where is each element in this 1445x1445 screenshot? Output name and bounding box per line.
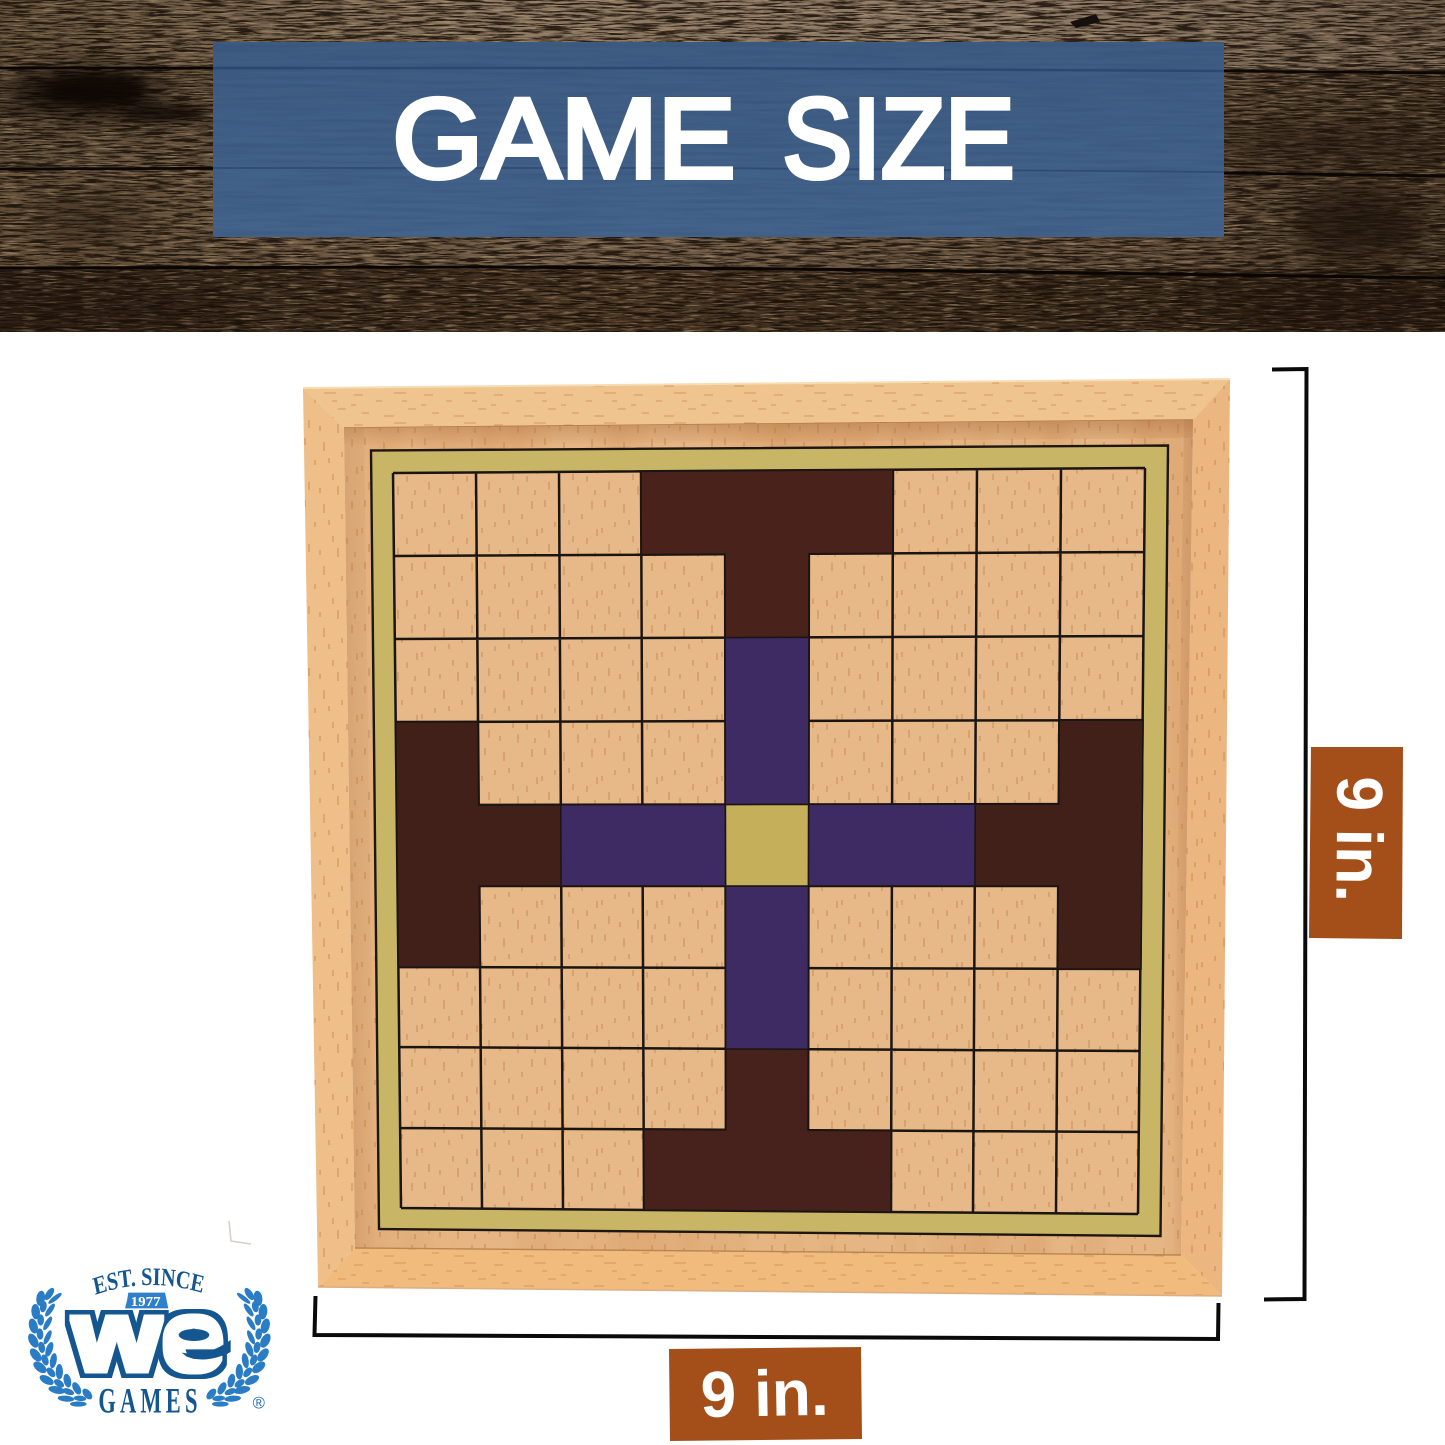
heading: GAME SIZE (392, 76, 1014, 202)
heading: GAME SIZE: GAME (392, 76, 736, 202)
header: rustic wood plank banner (0, 0, 1445, 332)
frame: top rail (303, 379, 1230, 428)
logo text: GAMES: GAMES (98, 1381, 202, 1421)
dimension bracket: height (1264, 369, 1306, 1300)
label: height 9 in.: 9 in. (1322, 776, 1396, 903)
game board: wooden framed board (303, 379, 1230, 1296)
logo ribbon: 1977 (125, 1293, 168, 1310)
board surface inside frame (344, 420, 1193, 1255)
logo ribbon: 1977: 1977 (131, 1295, 161, 1310)
purple cross arm: right (808, 804, 975, 886)
logo laurel: right (204, 1286, 273, 1407)
gold border band (371, 446, 1168, 1236)
right dark T marking (975, 720, 1143, 969)
label: width 9 in. (669, 1347, 862, 1441)
purple cross arm: left (561, 805, 726, 886)
playing field wood (393, 468, 1145, 1214)
logo: WE Games (28, 1268, 271, 1421)
centre gold square (725, 804, 809, 886)
logo wordmark: we: we (72, 1281, 224, 1393)
top dark T marking (641, 470, 893, 638)
logo text: EST. SINCE: EST. SINCE (92, 1268, 204, 1295)
heading: GAME SIZE: SIZE (782, 76, 1014, 202)
label: width 9 in.: 9 in. (700, 1356, 829, 1431)
purple cross arm: bottom (726, 886, 808, 1049)
grid lines: nine by nine (393, 468, 1145, 1214)
bottom dark T marking (644, 1049, 891, 1212)
frame: left rail (303, 388, 355, 1287)
frame: bottom rail (318, 1248, 1222, 1296)
stray mark near logo (229, 1221, 251, 1244)
frame: right rail (1181, 379, 1230, 1296)
label: height 9 in. (1309, 747, 1403, 939)
left dark T marking (396, 722, 561, 967)
title banner: blue painted plank (213, 42, 1224, 237)
purple cross arm: top (725, 637, 809, 805)
logo registered mark: ® (253, 1393, 266, 1412)
logo laurel: left (26, 1286, 94, 1407)
dimension bracket: width (314, 1296, 1218, 1339)
logo text: EST. SINCE (92, 1268, 204, 1295)
